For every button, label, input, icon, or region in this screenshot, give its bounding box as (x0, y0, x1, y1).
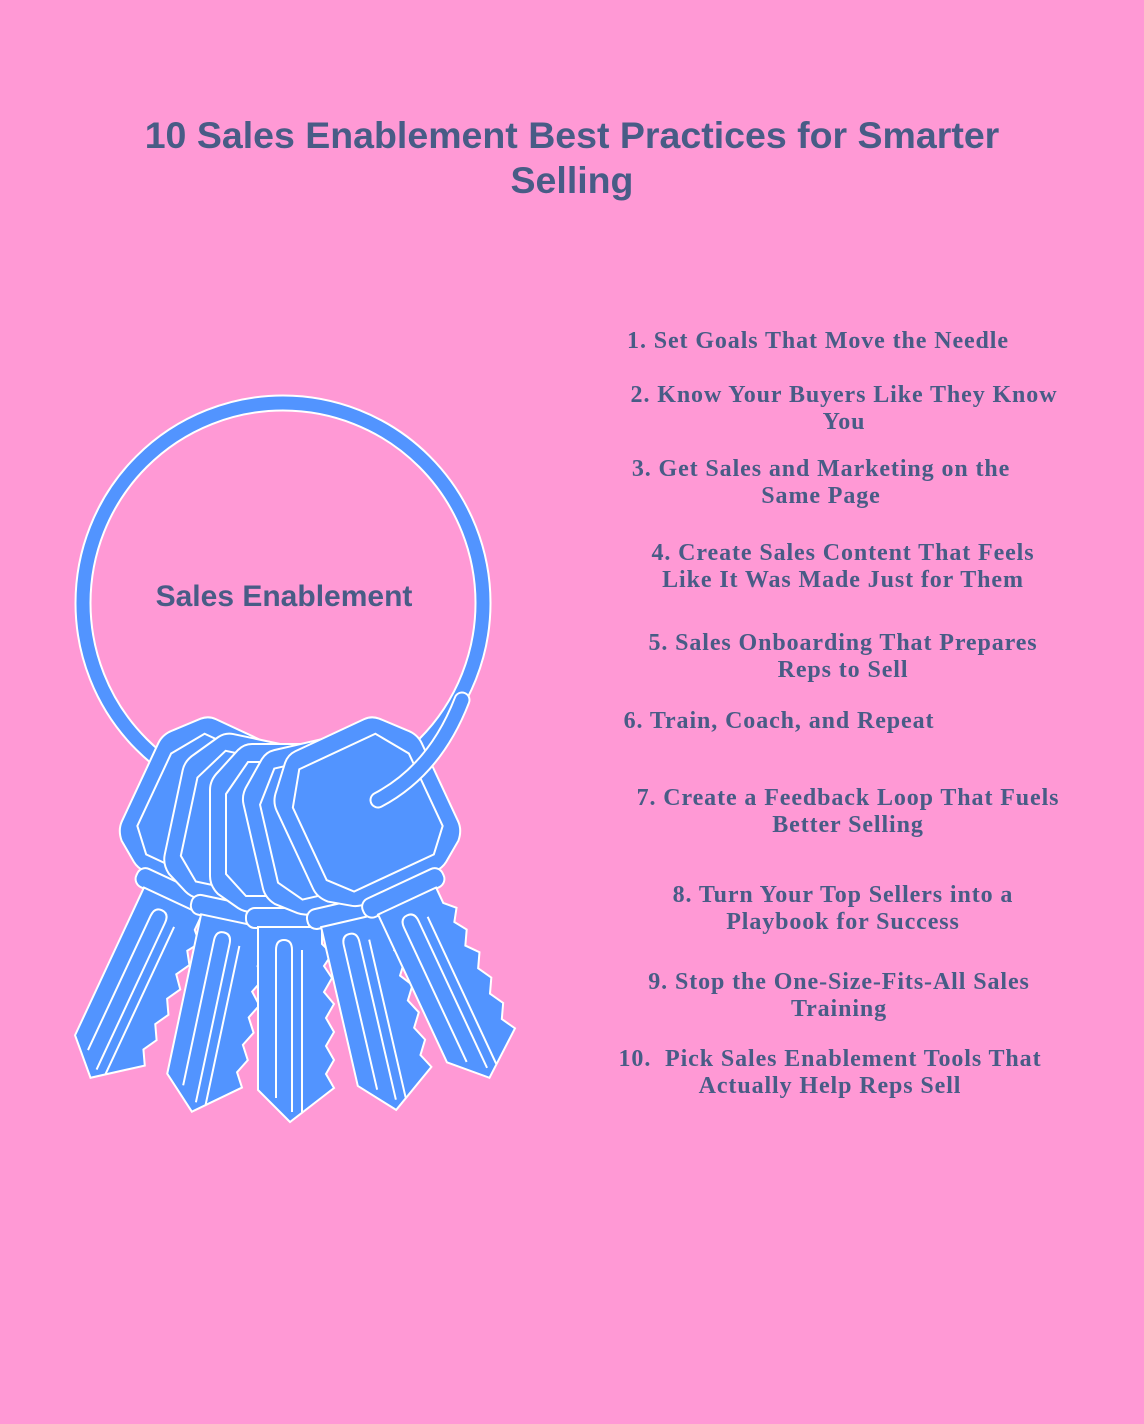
item 9 (648, 969, 1030, 1022)
keys (18, 701, 562, 1128)
item 10: 10. Pick Sales Enablement Tools That (619, 1046, 1041, 1072)
item 7 (637, 785, 1059, 838)
item 1: 1. Set Goals That Move the Needle (627, 328, 1009, 354)
ring tail over top key (378, 700, 462, 800)
item 5 (648, 630, 1038, 683)
item 9: Training (791, 996, 887, 1022)
item 5: 5. Sales Onboarding That Prepares (648, 630, 1038, 656)
item 8: 8. Turn Your Top Sellers into a (673, 882, 1013, 908)
title (145, 114, 999, 201)
item 4: Like It Was Made Just for Them (662, 567, 1024, 593)
item 4 (651, 540, 1034, 593)
item 3: Same Page (761, 483, 881, 509)
ring (83, 403, 483, 803)
item 7: Better Selling (772, 812, 924, 838)
item 4: 4. Create Sales Content That Feels (651, 540, 1034, 566)
item 3 (632, 456, 1010, 509)
item 2: 2. Know Your Buyers Like They Know (631, 382, 1057, 408)
item 10 (619, 1046, 1041, 1099)
title: 10 Sales Enablement Best Practices for Smarter (145, 114, 999, 156)
item 8 (673, 882, 1013, 935)
item 2 (631, 382, 1057, 435)
title: Selling (511, 159, 633, 201)
ring label: Sales Enablement (156, 580, 412, 613)
item 5: Reps to Sell (778, 657, 908, 683)
item 8: Playbook for Success (726, 909, 960, 935)
item 7: 7. Create a Feedback Loop That Fuels (637, 785, 1059, 811)
item 2: You (823, 409, 865, 435)
item 9: 9. Stop the One-Size-Fits-All Sales (648, 969, 1030, 995)
item 10: Actually Help Reps Sell (699, 1073, 961, 1099)
item 3: 3. Get Sales and Marketing on the (632, 456, 1010, 482)
item 6: 6. Train, Coach, and Repeat (624, 708, 934, 734)
